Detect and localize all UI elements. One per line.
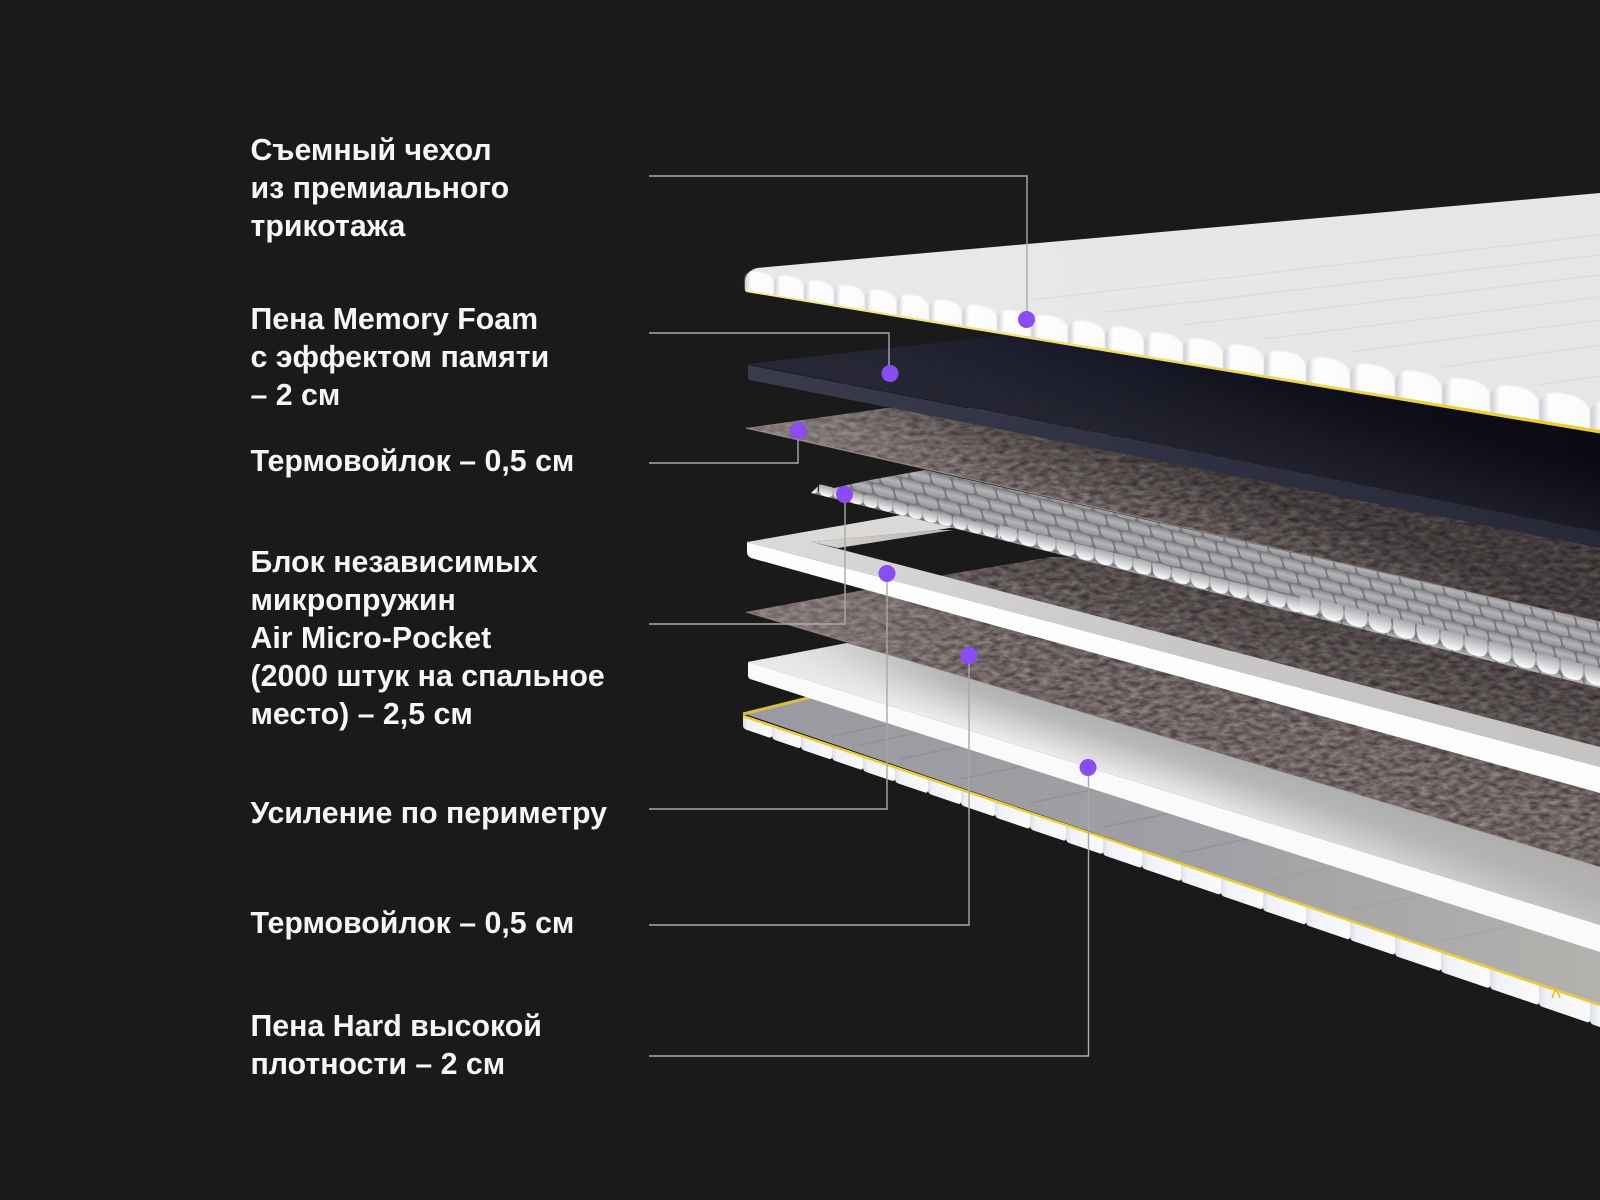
label: removable cover: трикотажа: [250, 210, 407, 243]
label: thermal felt lower: Термовойлок – 0,5 см: [250, 907, 574, 940]
label: micro-spring block: микропружин: [250, 584, 456, 617]
leader lines: [649, 176, 1088, 1056]
yellow edge of cover: [746, 290, 1600, 434]
layer: thermal felt lower: [746, 557, 1600, 867]
label: micro-spring block: Air Micro-Pocket: [250, 622, 491, 655]
label: micro-spring block: Блок независимых: [250, 546, 538, 579]
layer: white foam sheet: [748, 643, 1600, 952]
mattress: exploded layers: [743, 193, 1600, 1041]
quilted side of cover: [744, 270, 1600, 430]
layer: memory foam: [748, 335, 1600, 548]
label: thermal felt upper: Термовойлок – 0,5 см: [250, 445, 574, 478]
label: perimeter reinforcement: Усиление по периметру: [250, 797, 607, 830]
label: removable cover: Съемный чехол: [250, 134, 492, 167]
layer: thermal felt upper: [746, 408, 1600, 622]
yellow edge of base: [743, 697, 812, 714]
label: memory foam: с эффектом памяти: [250, 341, 549, 374]
layer: removable knitted cover: [745, 193, 1600, 458]
label: hard foam: плотности – 2 см: [250, 1048, 505, 1081]
layer: perimeter reinforcement frame: [747, 502, 1600, 793]
label: hard foam: Пена Hard высокой: [250, 1010, 542, 1043]
label: memory foam: Пена Memory Foam: [250, 303, 538, 336]
layer: micro-spring block: [811, 470, 1600, 688]
label: micro-spring block: место) – 2,5 см: [250, 698, 473, 731]
label: micro-spring block: (2000 штук на спальное: [250, 660, 605, 693]
marker dots: [790, 311, 1096, 776]
layer: Hard foam base: [743, 697, 1600, 1041]
quilted side of base: [743, 708, 1600, 1041]
label: removable cover: из премиального: [250, 172, 509, 205]
label: memory foam: – 2 см: [250, 379, 340, 412]
